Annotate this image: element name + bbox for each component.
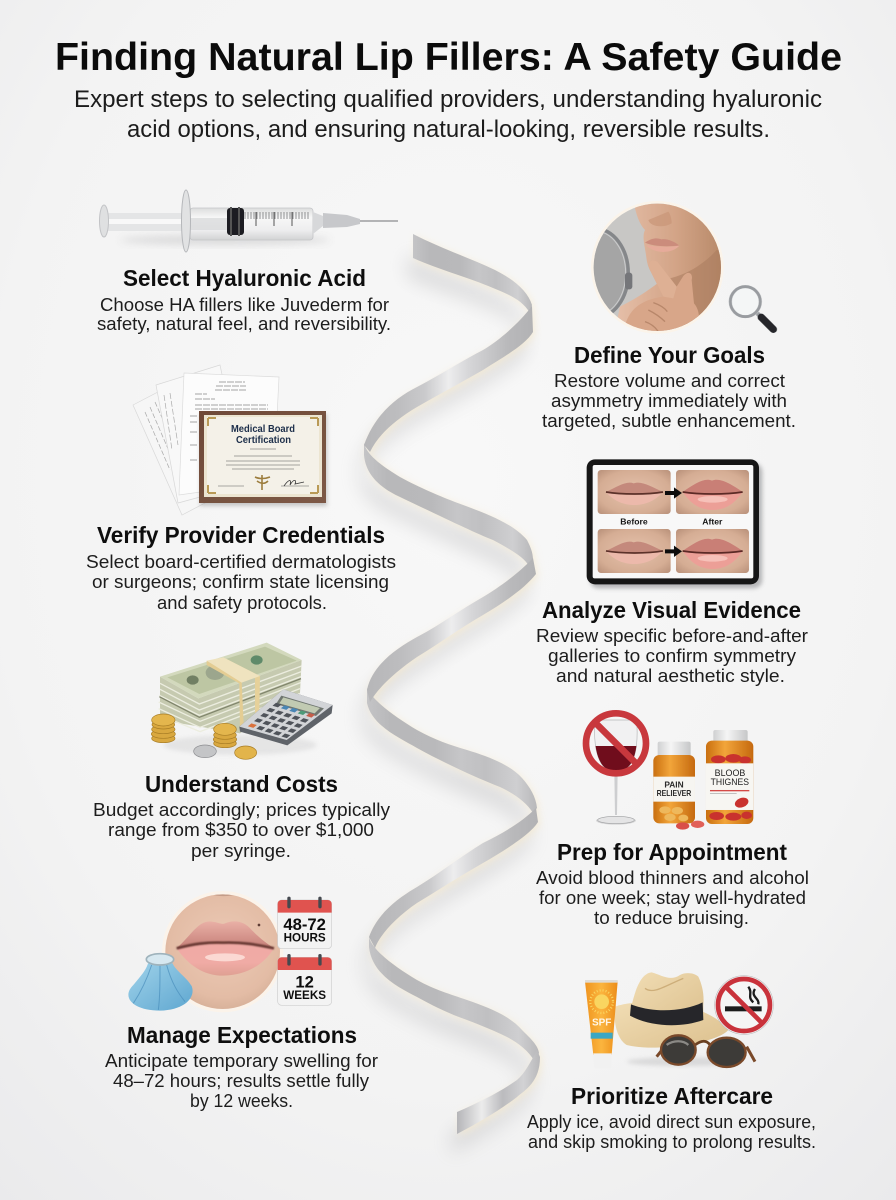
panel: analyze visual evidence	[536, 459, 808, 686]
description: safety, natural feel, and reversibility.	[97, 314, 391, 334]
description: Avoid blood thinners and alcohol	[536, 868, 809, 888]
description	[536, 868, 809, 928]
icon: lips, ice bag and calendars: WEEKS	[283, 989, 326, 1002]
subtitle: acid options, and ensuring natural-looking, reversible results.	[127, 116, 770, 143]
description: 48–72 hours; results settle fully	[113, 1071, 369, 1091]
description: Budget accordingly; prices typically	[93, 800, 390, 820]
icon: cash, coins and calculator	[151, 643, 333, 759]
heading: Select Hyaluronic Acid	[123, 265, 366, 291]
icon: syringe	[100, 190, 398, 252]
icon: tablet with before and after photos: After	[702, 517, 723, 527]
description: by 12 weeks.	[190, 1091, 293, 1111]
icon: lips, ice bag and calendars: 48-72	[283, 915, 326, 934]
icon: certificate and documents: Certification	[236, 434, 291, 446]
panel: verify provider credentials	[86, 365, 396, 613]
icon: no wine and medication bottles: BLOOB	[715, 768, 745, 778]
description	[536, 626, 808, 686]
heading: Manage Expectations	[127, 1022, 357, 1048]
description: Apply ice, avoid direct sun exposure,	[527, 1112, 816, 1132]
icon: no wine and medication bottles	[586, 713, 753, 830]
description: Review specific before-and-after	[536, 626, 808, 646]
description: to reduce bruising.	[594, 908, 749, 928]
description	[93, 800, 390, 861]
description	[86, 552, 396, 613]
description	[97, 295, 391, 334]
icon: certificate and documents: Medical Board	[231, 423, 295, 435]
icon: no wine and medication bottles: THIGNES	[711, 777, 749, 787]
heading: Verify Provider Credentials	[97, 522, 385, 548]
icon: tablet with before and after photos	[587, 459, 762, 588]
description: Restore volume and correct	[554, 371, 785, 391]
description: for one week; stay well-hydrated	[539, 888, 806, 908]
panel: understand costs	[93, 643, 390, 861]
description	[542, 371, 796, 431]
panel: manage expectations	[105, 888, 378, 1111]
description: targeted, subtle enhancement.	[542, 411, 796, 431]
subtitle	[74, 86, 822, 143]
description: Anticipate temporary swelling for	[105, 1051, 378, 1071]
description: galleries to confirm symmetry	[548, 646, 796, 666]
description: Select board-certified dermatologists	[86, 552, 396, 572]
description: range from $350 to over $1,000	[108, 820, 374, 840]
title: Finding Natural Lip Fillers: A Safety Guide	[55, 36, 842, 79]
heading: Prioritize Aftercare	[571, 1083, 773, 1109]
panel: prioritize aftercare	[527, 972, 816, 1152]
icon: no wine and medication bottles: PAIN	[664, 779, 684, 789]
panel: prep for appointment	[536, 713, 809, 928]
icon: face in mirror with magnifier	[591, 201, 778, 334]
description: and safety protocols.	[157, 593, 327, 613]
icon: lips, ice bag and calendars: HOURS	[284, 932, 326, 945]
description: per syringe.	[191, 841, 291, 861]
description	[527, 1112, 816, 1152]
icon: sunscreen, hat, sunglasses and no smoking sign	[585, 972, 773, 1069]
icon: certificate and documents	[133, 365, 327, 515]
subtitle: Expert steps to selecting qualified providers, understanding hyaluronic	[74, 86, 822, 113]
heading: Understand Costs	[145, 771, 338, 797]
icon: lips, ice bag and calendars	[128, 888, 332, 1013]
heading: Prep for Appointment	[557, 839, 787, 865]
heading: Define Your Goals	[574, 342, 765, 368]
icon: sunscreen, hat, sunglasses and no smoking sign: SPF	[592, 1018, 611, 1029]
icon: lips, ice bag and calendars: 12	[295, 972, 314, 991]
icon: tablet with before and after photos: Before	[620, 517, 648, 527]
description: Choose HA fillers like Juvederm for	[100, 295, 389, 315]
panel: select hyaluronic acid	[97, 190, 398, 334]
description: or surgeons; confirm state licensing	[92, 572, 389, 592]
description: asymmetry immediately with	[551, 391, 787, 411]
icon: no wine and medication bottles: RELIEVER	[657, 788, 691, 798]
description: and natural aesthetic style.	[556, 666, 785, 686]
panel: define your goals	[542, 200, 796, 431]
description	[105, 1051, 378, 1111]
description: and skip smoking to prolong results.	[528, 1132, 816, 1152]
heading: Analyze Visual Evidence	[542, 597, 801, 623]
central silver spiral ribbon	[358, 234, 542, 1154]
